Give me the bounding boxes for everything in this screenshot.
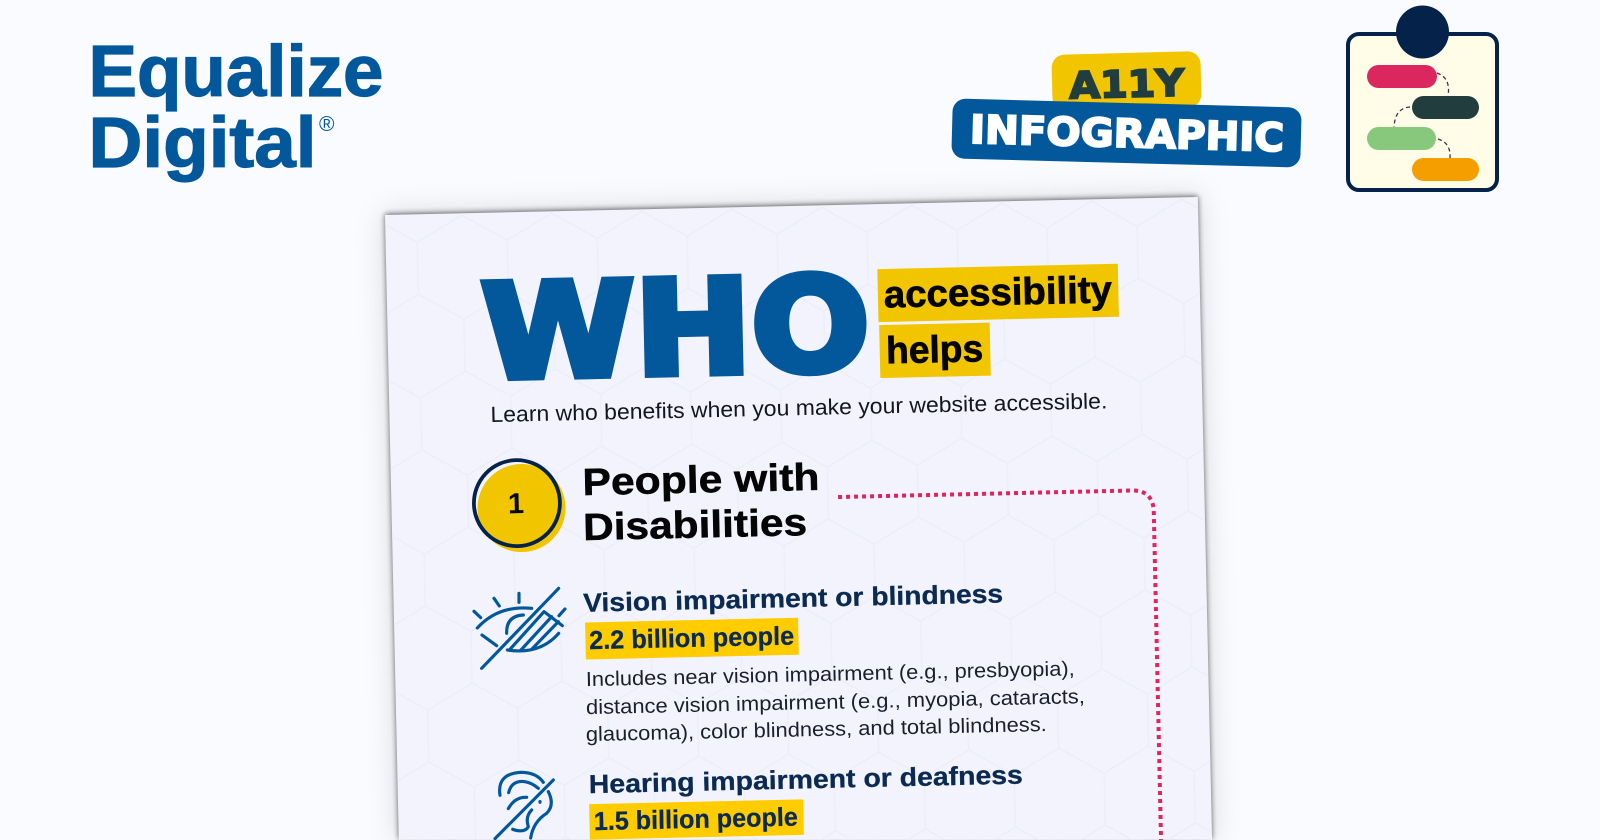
text block: hearing impairment: 1.5 billion people [593, 802, 798, 836]
logo: Equalize Digital: ® [319, 113, 335, 136]
text block: vision impairment: glaucoma), color blindness, and total blindness. [586, 713, 1047, 746]
subtitle: Learn who benefits when you make your website accessible. [490, 388, 1108, 427]
text block: vision impairment: 2.2 billion people [589, 621, 794, 655]
dotted connector [838, 490, 1161, 840]
icon: clipboard flowchart [1348, 6, 1497, 190]
text block: hearing impairment [588, 760, 1024, 840]
badge: A11Y infographic: A11Y [1069, 61, 1186, 107]
icon: crossed-out eye [474, 588, 565, 668]
icon: crossed-out ear [495, 772, 553, 839]
heading: People with Disabilities: People with [582, 457, 820, 504]
panel: infographic page [385, 197, 1212, 840]
heading highlight: helps: helps [886, 328, 984, 372]
text block: vision impairment: Includes near vision impairment (e.g., presbyopia), [586, 657, 1075, 691]
logo: Equalize Digital: Equalize [88, 32, 383, 112]
heading: People with Disabilities: Disabilities [583, 502, 807, 549]
text block: vision impairment: Vision impairment or blindness [583, 578, 1003, 618]
logo: Equalize Digital [88, 32, 383, 183]
heading: People with Disabilities [582, 457, 821, 549]
title: WHO: WHO [480, 248, 871, 409]
number badge: 1 [473, 459, 566, 553]
heading highlight: accessibility: accessibility [883, 269, 1112, 316]
logo: Equalize Digital: Digital [88, 104, 316, 183]
number badge: 1: 1 [508, 488, 524, 520]
text block: hearing impairment: Hearing impairment or deafness [589, 760, 1023, 799]
text block: vision impairment: distance vision impairment (e.g., myopia, cataracts, [586, 685, 1085, 719]
text block: vision impairment [583, 577, 1086, 746]
badge: A11Y infographic [951, 51, 1302, 168]
badge: A11Y infographic: INFOGRAPHIC [969, 108, 1284, 161]
